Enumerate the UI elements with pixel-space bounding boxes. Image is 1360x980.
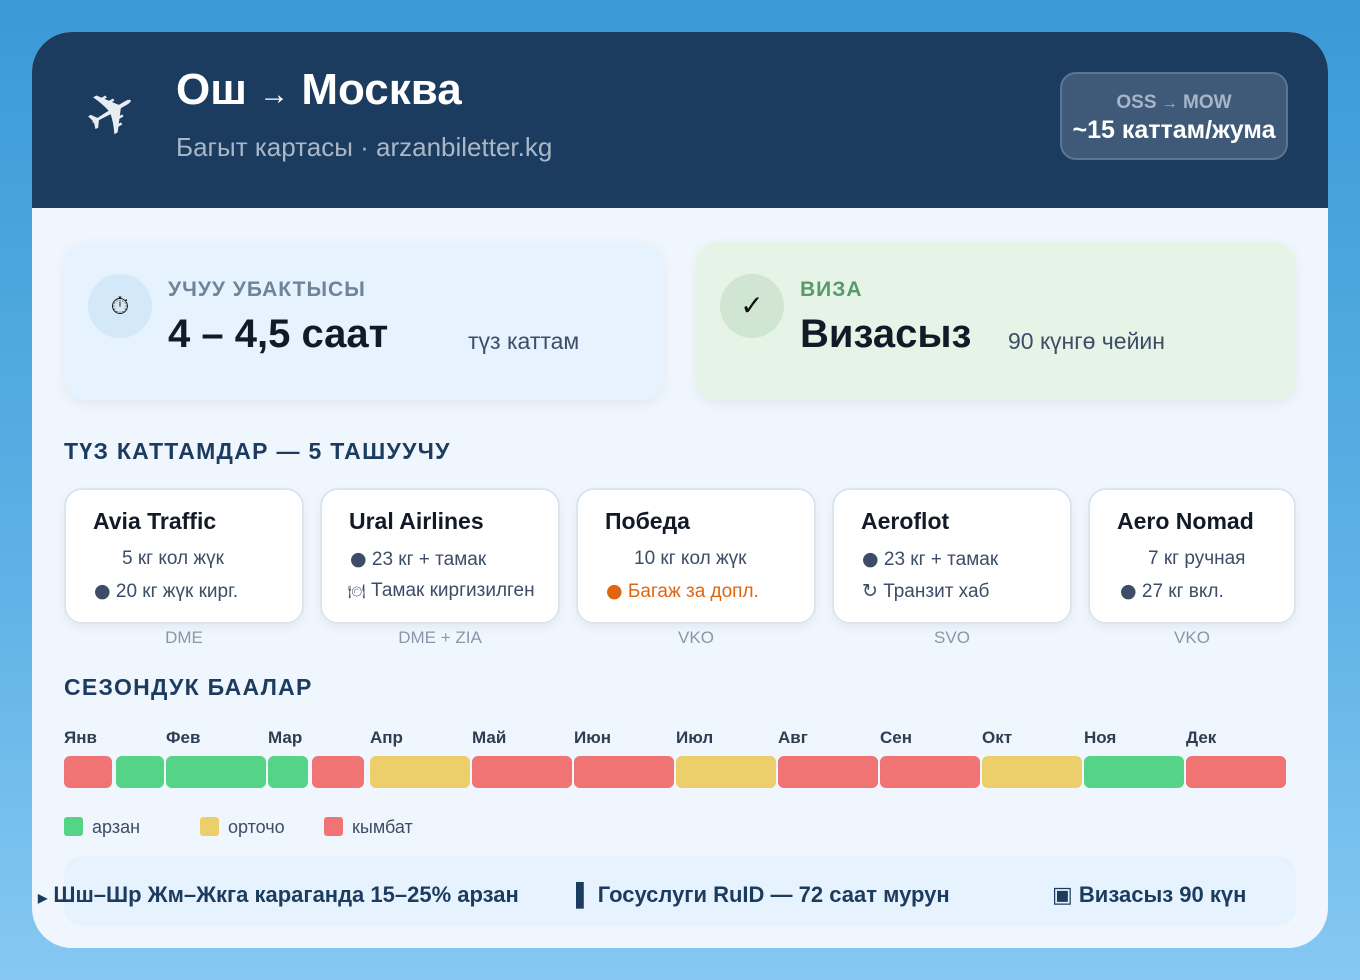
chart: seasonal price bar: Фев: [166, 728, 200, 747]
badge: frequency: [1060, 72, 1288, 160]
chart: seasonal price bar: Дек: [1186, 728, 1216, 747]
carrier: Aero Nomad: ● 27 кг вкл.: [1120, 580, 1224, 602]
icon: check: [720, 274, 784, 338]
carrier: Pobeda: ● Багаж за допл.: [606, 580, 759, 602]
heading: carriers: ТҮЗ КАТТАМДАР — 5 ТАШУУЧУ: [64, 438, 451, 464]
chart: seasonal price bar: Июл: [676, 728, 713, 747]
chart: seasonal price bar: Авг: [778, 728, 808, 747]
note: түз каттам: [468, 328, 579, 354]
header: [32, 32, 1328, 208]
heading: seasonal prices: СЕЗОНДУК БААЛАР: [64, 674, 313, 700]
chart: seasonal price bar: Ноя: [1084, 728, 1116, 747]
carrier: Aeroflot: [832, 488, 1072, 624]
carrier: Ural Airlines: 🍽︎ Тамак киргизилген: [348, 580, 535, 601]
carrier: Avia Traffic: 5 кг кол жүк: [122, 548, 224, 569]
carrier: Aeroflot: ● 23 кг + тамак: [862, 548, 998, 570]
badge: frequency: ~15 каттам/жума: [1073, 116, 1275, 144]
subtitle: Багыт картасы · arzanbiletter.kg: [176, 132, 552, 162]
icon: stopwatch: ⏱: [111, 292, 129, 320]
text: SVO: [934, 628, 970, 647]
chart: seasonal price bar: Июн: [574, 728, 611, 747]
carrier: Ural Airlines: ● 23 кг + тамак: [350, 548, 486, 570]
text: DME: [165, 628, 203, 647]
legend: орточо: [228, 817, 285, 837]
value: 4 – 4,5 саат: [168, 312, 388, 356]
legend: [64, 817, 413, 837]
chart: seasonal price bar: Окт: [982, 728, 1012, 747]
carrier: Ural Airlines: Ural Airlines: [349, 508, 484, 534]
icon: stopwatch: [88, 274, 152, 338]
carrier: Pobeda: 10 кг кол жүк: [634, 548, 746, 569]
note: 90 күнгө чейин: [1008, 328, 1165, 354]
tip: visa free: ▣ Визасыз 90 күн: [1052, 882, 1246, 908]
badge: frequency: OSS → MOW: [1116, 92, 1232, 113]
carrier: Aero Nomad: 7 кг ручная: [1148, 548, 1245, 569]
legend: кымбат: [352, 817, 413, 837]
carrier: Pobeda: [576, 488, 816, 624]
tip: gosuslugi: ▌ Госуслуги RuID — 72 саат мурун: [576, 882, 950, 907]
carrier: Aeroflot: ↻ Транзит хаб: [862, 580, 989, 602]
chart: seasonal price bar: Сен: [880, 728, 912, 747]
text: VKO: [1174, 628, 1210, 647]
value: Визасыз: [800, 312, 971, 356]
chart: seasonal price bar: Янв: [64, 728, 97, 747]
tip: cheap days: ▶ Шш–Шр Жм–Жкга караганда 15–25% арзан: [38, 882, 519, 907]
carrier: Avia Traffic: Avia Traffic: [93, 508, 216, 534]
chart: seasonal price bar: Апр: [370, 728, 403, 747]
label: УЧУУ УБАКТЫСЫ: [168, 278, 366, 301]
legend: арзан: [92, 817, 140, 837]
text: VKO: [678, 628, 714, 647]
text: DME + ZIA: [398, 628, 482, 647]
panel: visa: [696, 242, 1296, 400]
carrier: Ural Airlines: [320, 488, 560, 624]
chart: seasonal price bar: Мар: [268, 728, 302, 747]
carrier: Aero Nomad: Aero Nomad: [1117, 508, 1254, 534]
carrier: Aero Nomad: [1088, 488, 1296, 624]
panel: flight time: [64, 242, 664, 400]
tips strip: [64, 856, 1296, 926]
icon: plane: ✈: [71, 68, 152, 157]
title: Ош → Москва: [176, 65, 462, 114]
carrier: Avia Traffic: ● 20 кг жүк кирг.: [94, 580, 238, 602]
icon: check: ✓: [740, 290, 764, 321]
carrier: Avia Traffic: [64, 488, 304, 624]
label: ВИЗА: [800, 278, 863, 301]
carrier: Pobeda: Победа: [605, 508, 690, 534]
carrier: Aeroflot: Aeroflot: [861, 508, 949, 534]
chart: seasonal price bar: Май: [472, 728, 506, 747]
